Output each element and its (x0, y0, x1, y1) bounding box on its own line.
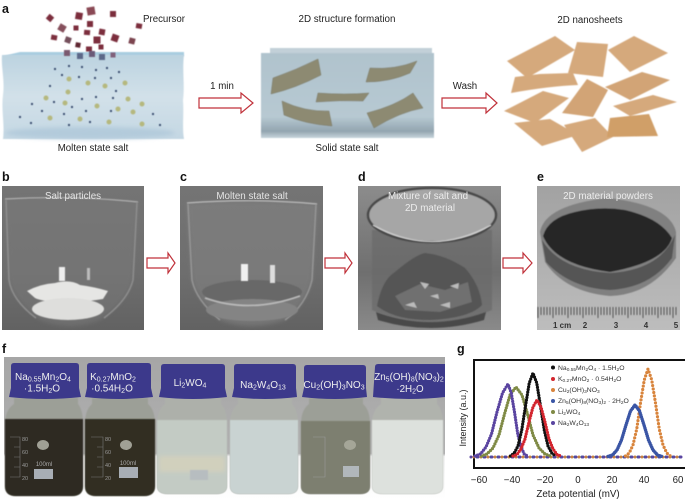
label: Precursor: Precursor (143, 14, 186, 25)
curve: orange Cu2(OH)3NO3 (626, 369, 670, 456)
legend: Cu (558, 387, 567, 394)
bottle 5: 2 (316, 384, 320, 392)
x tick labels: 20 (607, 475, 618, 486)
solid salt block with sheets (261, 48, 434, 138)
bottle 3: 4 (203, 382, 207, 390)
bottle 2: 2 (121, 388, 125, 395)
label: c: c (180, 170, 187, 184)
bottle 2: 60 (105, 450, 111, 456)
bottle 6: Zn (374, 372, 444, 384)
label: d: d (358, 170, 366, 184)
legend: 2 (621, 400, 624, 406)
bottle 2: K (90, 372, 136, 384)
legend: (OH) (569, 398, 583, 405)
label: e: e (537, 170, 544, 184)
legend: 3 (584, 389, 587, 395)
label: Solid state salt: Solid state salt (315, 143, 379, 154)
ruler: 1 cm (553, 321, 571, 330)
legend: O (619, 365, 625, 372)
curve: black Na0.55Mn2O4 (510, 373, 556, 456)
legend: O (616, 376, 621, 383)
bottle 2: 2 (132, 376, 136, 384)
bottle 5: 3 (342, 384, 346, 392)
bottle 2: 0.27 (97, 376, 110, 384)
bottle 6: (NO (415, 372, 433, 383)
legend: 2 (587, 378, 590, 384)
label: 2D structure formation: 2D structure formation (299, 14, 395, 25)
legend: 0.27 (563, 378, 572, 384)
bottle 1: Mn (41, 372, 55, 383)
legend: 3 (597, 389, 600, 395)
bottle 2: MnO (110, 372, 132, 383)
y axis title: Intensity (a.u.) (458, 389, 468, 447)
bottle 4: O (270, 380, 278, 391)
bottle 2: 40 (105, 463, 111, 469)
bottle 5: (OH) (320, 380, 342, 391)
label: 1 min: 1 min (210, 81, 234, 92)
bottle 6: 8 (411, 376, 415, 384)
curve: blue Zn5(OH)8(NO3)2 (608, 405, 662, 456)
molten salt block (2, 52, 184, 139)
bottle 2 (85, 363, 155, 496)
x tick labels: 60 (673, 475, 684, 486)
panel f: bottles photo (2, 342, 445, 499)
legend: 2 (567, 422, 570, 428)
legend: 2 (617, 367, 620, 373)
precursor cubes (46, 6, 142, 60)
arrow: b to c (147, 253, 175, 273)
bottle 1: 4 (67, 376, 71, 384)
bottle 1: O (59, 372, 67, 383)
legend: · 1.5H (596, 365, 617, 372)
legend: 5 (566, 400, 569, 406)
label: Mixture of salt and 2D material: 2D material (405, 203, 455, 214)
bottle 4 (230, 364, 298, 494)
bottle 1: ·1.5H (24, 384, 60, 395)
bottle 1: 0.55 (28, 376, 42, 384)
molten pool (202, 280, 302, 321)
legend: O (578, 420, 584, 427)
legend: 4 (593, 367, 596, 373)
legend: 3 (598, 400, 601, 406)
ruler: 2 (583, 321, 588, 330)
legend: WO (566, 409, 578, 416)
mixture pile (377, 253, 482, 320)
legend: 13 (584, 422, 589, 428)
ruler: 3 (614, 321, 619, 330)
label: g: g (457, 342, 465, 356)
bottle 5 (301, 365, 370, 494)
bottle 1: 80 (22, 437, 28, 443)
legend: 0.55 (567, 367, 576, 373)
legend: · 0.54H (589, 376, 614, 383)
legend: O (624, 398, 629, 405)
legend: Na (558, 420, 567, 427)
legend: MnO (572, 376, 587, 383)
x tick labels: 40 (639, 475, 650, 486)
ruler: 4 (644, 321, 649, 330)
legend: Li (558, 409, 563, 416)
label: Salt particles: Salt particles (45, 191, 101, 202)
curve: olive Li2WO4 (482, 387, 550, 456)
bottle 3 (157, 364, 227, 494)
legend: 4 (578, 411, 581, 417)
bottle 6: O (416, 384, 424, 395)
label: Molten state salt: Molten state salt (58, 143, 129, 154)
legend: 2 (603, 400, 606, 406)
legend: (OH) (569, 387, 584, 394)
panel e: powder photo (537, 170, 680, 330)
bottle 6: ) (437, 372, 440, 383)
bottle 6: (OH) (390, 372, 411, 383)
bottle 1: O (52, 384, 60, 394)
bottle 2: 80 (105, 437, 111, 443)
yellow particles (44, 76, 144, 126)
bottle 2: ·0.54H (91, 384, 133, 395)
label: a: a (2, 2, 10, 16)
legend: NO (587, 387, 597, 394)
x tick labels: −40 (504, 475, 521, 486)
legend: 8 (583, 400, 586, 406)
salt pile (27, 281, 108, 320)
legend: (NO (586, 398, 598, 405)
bottle 6: 3 (433, 376, 437, 384)
legend: Na (558, 365, 567, 372)
label: b: b (2, 170, 10, 184)
label: f: f (2, 342, 7, 356)
bottle 6: 5 (386, 376, 390, 384)
bottle 1: Na (15, 372, 71, 384)
curve: purple Na2W4O13 (475, 384, 528, 456)
arrow: c to d (325, 253, 352, 273)
bottle 6: ·2H (396, 384, 424, 396)
bottle 5: NO (346, 380, 361, 391)
bottle 1: 2 (55, 376, 59, 384)
legend: 2 (586, 367, 588, 373)
label: Molten state salt: Molten state salt (216, 191, 288, 202)
legend: Zn (558, 398, 566, 405)
x tick labels: 0 (575, 475, 581, 486)
bottle 2: 20 (105, 476, 111, 482)
ruler: 5 (674, 321, 679, 330)
bottle 4: W (257, 380, 267, 391)
legend: 2 (567, 389, 570, 395)
legend: 2 (613, 378, 616, 384)
bottle 4: 4 (266, 384, 270, 392)
x tick labels: −20 (537, 475, 554, 486)
legend: Mn (576, 365, 586, 372)
panel a: synthesis schematic (2, 2, 677, 154)
baseline dots (471, 456, 684, 458)
legend: 2 (563, 411, 566, 417)
x tick labels: −60 (471, 475, 488, 486)
bottle 3: 2 (181, 382, 185, 390)
legend: K (558, 376, 563, 383)
legend: O (588, 365, 593, 372)
bottle 1: 2 (48, 388, 52, 395)
legend (551, 365, 629, 428)
bottle 4: 13 (278, 384, 286, 392)
panel g: zeta potential chart (457, 342, 685, 499)
bottle 3: WO (185, 378, 203, 389)
bottle 5: 3 (361, 384, 365, 392)
bottle 1: 40 (22, 463, 28, 469)
2D nanosheets (504, 36, 677, 152)
dish of powder (540, 198, 676, 296)
bottle 3: Li (174, 378, 181, 389)
legend: ) (601, 398, 603, 405)
bottle 1: 60 (22, 450, 28, 456)
dissolved ions (19, 65, 161, 126)
legend: 4 (576, 422, 579, 428)
panel c: molten salt photo (180, 170, 323, 330)
bottle 5: Cu (303, 380, 316, 391)
label: Mixture of salt and 2D material: Mixture of salt and (388, 191, 468, 202)
plot frame (474, 360, 685, 468)
bottle 2: 100ml (120, 461, 136, 467)
legend: · 2H (606, 398, 621, 405)
ruler (538, 307, 679, 330)
label: 2D material powders: 2D material powders (563, 191, 653, 202)
arrow: wash (442, 93, 497, 113)
bottle 4: 2 (253, 384, 257, 392)
legend: W (569, 420, 576, 427)
label: Wash: Wash (453, 81, 477, 92)
arrow: d to e (503, 253, 532, 273)
curve: red K0.27MnO2 (513, 400, 561, 456)
bottle 6: 2 (412, 388, 416, 396)
bottle 1: 20 (22, 476, 28, 482)
arrow: 1 min (199, 93, 253, 113)
bottle 4: Na (240, 380, 253, 391)
bottle 1: 100ml (36, 462, 52, 468)
x tick labels (471, 475, 684, 486)
bottle 6 (372, 364, 445, 494)
panel d: mixture photo (358, 170, 501, 330)
bottle 1 (5, 363, 83, 496)
bottle 6: 2 (440, 376, 444, 384)
bottle 2: O (125, 384, 133, 394)
panel b: salt particles photo (2, 170, 144, 330)
label: 2D nanosheets: 2D nanosheets (557, 15, 623, 26)
